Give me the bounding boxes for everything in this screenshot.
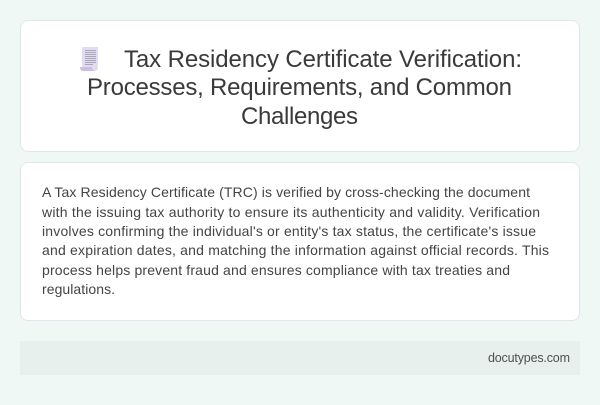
icon: document receipt [80, 47, 98, 71]
title: Tax Residency Certificate Verification: [124, 46, 522, 73]
description text: process helps prevent fraud and ensures compliance with tax treaties and [42, 262, 510, 278]
footer bar [20, 341, 580, 375]
title: Processes, Requirements, and Common [87, 74, 512, 101]
title: Challenges [241, 103, 358, 130]
description text: A Tax Residency Certificate (TRC) is verified by cross-checking the document [42, 184, 530, 200]
title [87, 46, 522, 130]
footer source text: docutypes.com [488, 351, 570, 365]
description text: with the issuing tax authority to ensure its authenticity and validity. Verification [41, 204, 540, 220]
panel: description card [20, 162, 580, 321]
description text: involves confirming the individual's or entity's tax status, the certificate's issue [42, 223, 536, 239]
description text: regulations. [42, 281, 115, 297]
description text [41, 184, 549, 297]
description text: and expiration dates, and matching the information against official records. This [42, 242, 549, 258]
panel: title card [20, 20, 580, 152]
